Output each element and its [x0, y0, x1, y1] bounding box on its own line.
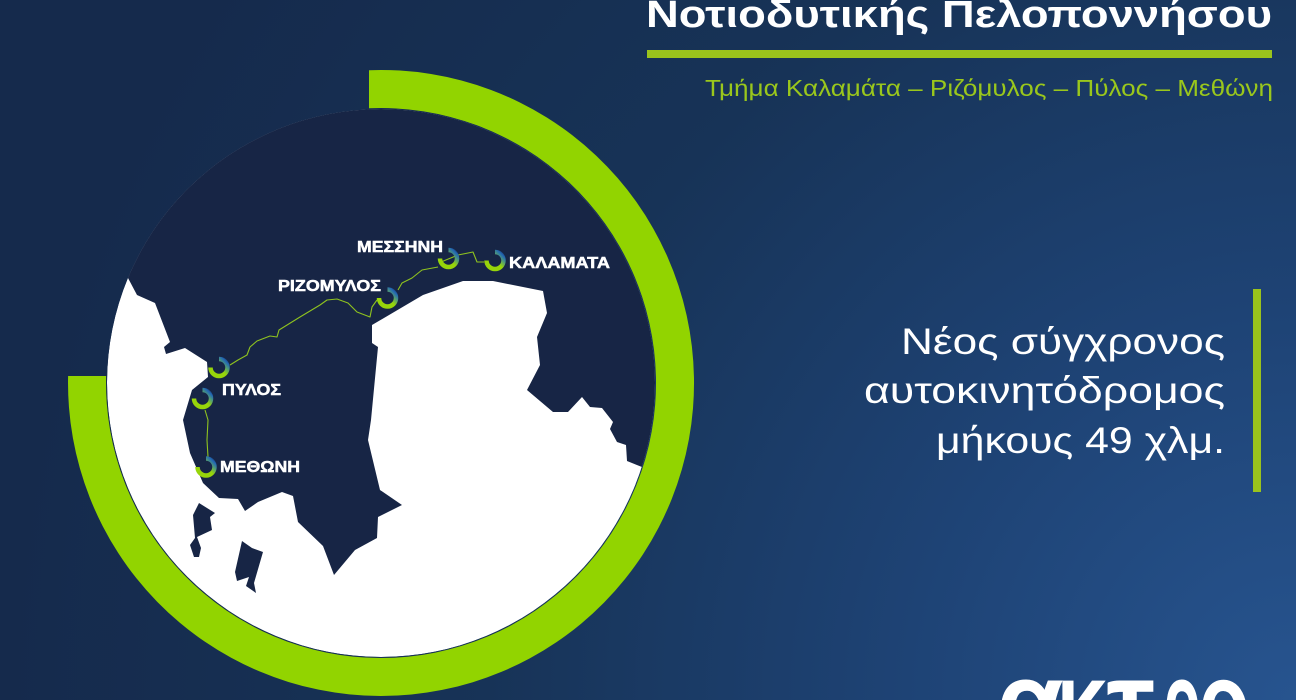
description text: αυτοκινητόδρομος	[864, 370, 1225, 411]
island two	[235, 541, 263, 593]
route line	[205, 252, 484, 457]
stop marker: Πύλος north	[210, 359, 228, 376]
label: Μεσσήνη: ΜΕΣΣΗΝΗ	[357, 239, 443, 256]
description text	[864, 321, 1225, 461]
sea background	[107, 109, 655, 657]
description text: μήκους 49 χλμ.	[936, 420, 1225, 461]
stop marker: Πύλος south	[194, 390, 211, 407]
map disc	[107, 109, 655, 657]
subtitle: Τμήμα Καλαμάτα – Ριζόμυλος – Πύλος – Μεθώνη	[705, 75, 1273, 101]
label: Καλαμάτα: ΚΑΛΑΜΑΤΑ	[509, 255, 611, 272]
label: Μεθώνη: ΜΕΘΩΝΗ	[220, 459, 300, 476]
logo	[998, 640, 1249, 700]
island one	[190, 503, 215, 557]
description accent bar	[1253, 289, 1261, 492]
land mass	[128, 109, 655, 575]
stop marker: Μεθώνη	[198, 458, 214, 476]
description text: Νέος σύγχρονος	[901, 321, 1225, 362]
title underline	[647, 50, 1272, 58]
label: Ριζόμυλος: ΡΙΖΟΜΥΛΟΣ	[278, 278, 381, 295]
green ring	[68, 70, 694, 696]
stop marker: Μεσσήνη	[440, 250, 457, 267]
stop marker: Ριζόμυλος	[379, 290, 396, 306]
label: Πύλος: ΠΥΛΟΣ	[222, 382, 281, 399]
stop marker: Καλαμάτα	[486, 252, 504, 269]
